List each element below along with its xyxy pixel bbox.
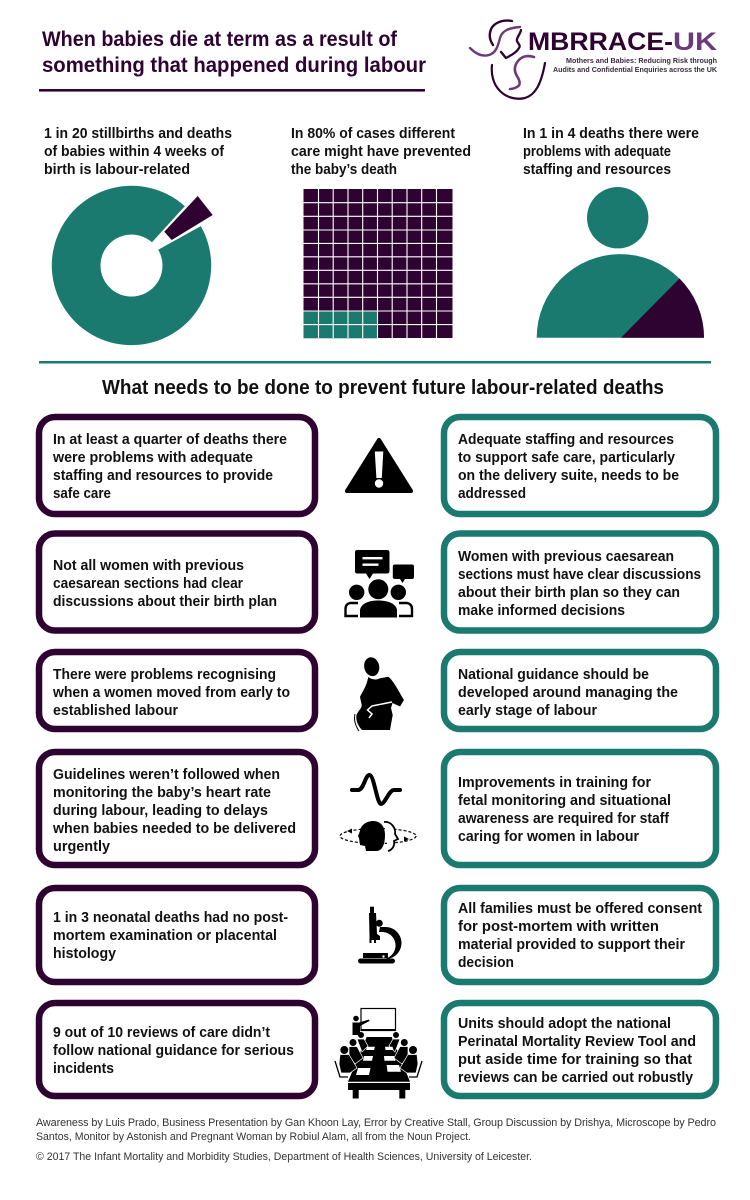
footer credits — [36, 1117, 716, 1163]
panel: caesarean problem — [39, 534, 315, 630]
person chart: 1 in 4 — [537, 187, 704, 338]
panel: post-mortem action: for post-mortem with written — [458, 918, 659, 935]
panel: early labour action: National guidance should be — [458, 666, 649, 683]
panel: post-mortem problem: 1 in 3 neonatal deaths had no post- — [53, 909, 288, 926]
donut chart: 1 in 20 — [52, 186, 213, 345]
panel: reviews action: reviews can be carried out robustly — [458, 1069, 694, 1086]
icon: group discussion — [346, 550, 414, 618]
panel: staffing problem: staffing and resources to provide — [53, 467, 273, 484]
panel: staffing action — [444, 417, 716, 514]
stat text: 80%: In 80% of cases different — [291, 125, 455, 142]
panel: caesarean action: Women with previous caesarean — [458, 548, 674, 565]
footer credits: Awareness by Luis Prado, Business Presentation by Gan Khoon Lay, Error by Creative Stall, Group Discussion by Drishya, Microscope by Pedro — [36, 1117, 716, 1129]
panel: caesarean problem: Not all women with previous — [53, 557, 244, 574]
stat text: 1 in 20 — [44, 125, 232, 178]
logo: MBRRACE-UK: Mothers and Babies: Reducing Risk through — [566, 56, 717, 65]
footer credits: Santos, Monitor by Astonish and Pregnant Woman by Robiul Alam, all from the Noun Project. — [36, 1131, 471, 1143]
heading: What needs to be done to prevent future labour-related deaths — [102, 377, 664, 399]
panel: staffing problem — [39, 417, 315, 514]
logo: MBRRACE-UK: Audits and Confidential Enquiries across the UK — [553, 65, 717, 74]
panel: caesarean action — [444, 534, 716, 630]
panel: early labour problem: There were problems recognising — [53, 666, 276, 683]
panel: early labour problem: when a women moved from early to — [52, 684, 290, 701]
title: When babies die at term as a result of — [42, 28, 398, 51]
logo: MBRRACE-UK: UK — [673, 28, 717, 56]
panel: early labour action — [444, 652, 716, 729]
panel: monitoring action — [444, 752, 716, 865]
panel: reviews problem: incidents — [53, 1060, 114, 1077]
stat text: 80%: care might have prevented — [291, 143, 471, 160]
panel: reviews problem — [39, 1003, 315, 1096]
panel: monitoring problem: monitoring the baby’s heart rate — [53, 784, 271, 801]
stat text: 80%: the baby’s death — [291, 161, 397, 178]
panel: post-mortem problem: mortem examination or placental — [53, 927, 277, 944]
panel: reviews action: Units should adopt the national — [458, 1015, 671, 1032]
panel: staffing problem: were problems with adequate — [52, 449, 253, 466]
panel: staffing action: Adequate staffing and resources — [458, 431, 674, 448]
panel: early labour problem — [39, 652, 315, 729]
panel: post-mortem problem — [39, 888, 315, 982]
panel: post-mortem action: material provided to support their — [458, 936, 685, 953]
panel: monitoring problem: during labour, leading to delays — [53, 802, 268, 819]
panel: post-mortem action — [444, 888, 716, 982]
panel: caesarean action: sections must have clear discussions — [458, 566, 701, 583]
panel: monitoring action: Improvements in training for — [458, 774, 651, 791]
panel: reviews problem: 9 out of 10 reviews of care didn’t — [53, 1024, 270, 1041]
panel: monitoring action: caring for women in labour — [458, 828, 639, 845]
logo: MBRRACE-UK: MBRRACE- — [528, 28, 673, 56]
panel: monitoring action: fetal monitoring and situational — [458, 792, 671, 809]
panel: staffing action: addressed — [458, 485, 526, 502]
stat text: 1 in 20: of babies within 4 weeks of — [44, 143, 225, 160]
stat text: 1 in 20: 1 in 20 stillbirths and deaths — [44, 125, 232, 142]
panel: caesarean action: about their birth plan so they can — [458, 584, 680, 601]
stat text: 1 in 4: problems with adequate — [523, 143, 671, 160]
panel: caesarean problem: caesarean sections had clear — [53, 575, 243, 592]
panel: monitoring problem — [39, 752, 315, 865]
panel: staffing action: on the delivery suite, needs to be — [458, 467, 679, 484]
panel: staffing action: to support safe care, particularly — [458, 449, 676, 466]
panel: post-mortem action: decision — [458, 954, 514, 971]
waffle chart: 80% — [304, 189, 452, 338]
icon: business presentation — [335, 1008, 422, 1098]
panel: monitoring problem: Guidelines weren’t followed when — [53, 766, 280, 783]
title — [42, 28, 426, 77]
icon: warning triangle — [347, 440, 411, 491]
stat text: 1 in 4 — [523, 125, 699, 178]
panel: staffing problem: safe care — [53, 485, 111, 502]
stat text: 1 in 4: staffing and resources — [523, 161, 671, 178]
panel: monitoring problem: when babies needed to be delivered — [52, 820, 296, 837]
icon: pregnant woman — [354, 656, 404, 731]
panel: post-mortem problem: histology — [53, 945, 117, 962]
icon: monitor wave and awareness — [340, 775, 416, 851]
panel: post-mortem action: All families must be offered consent — [458, 900, 702, 917]
panel: reviews problem: follow national guidance for serious — [53, 1042, 294, 1059]
panel: caesarean action: make informed decisions — [458, 602, 625, 619]
stat text: 80% — [291, 125, 471, 178]
logo: MBRRACE-UK — [470, 21, 717, 99]
panel: monitoring action: awareness are required for staff — [458, 810, 670, 827]
panel: reviews action — [444, 1003, 716, 1096]
panel: early labour action: developed around managing the — [458, 684, 678, 701]
panel: monitoring problem: urgently — [53, 838, 111, 855]
panel: early labour action: early stage of labour — [458, 702, 597, 719]
title: something that happened during labour — [42, 54, 426, 77]
panel: reviews action: Perinatal Mortality Review Tool and — [458, 1033, 696, 1050]
panel: reviews action: put aside time for training so that — [458, 1051, 692, 1068]
panel: early labour problem: established labour — [53, 702, 178, 719]
footer credits: © 2017 The Infant Mortality and Morbidity Studies, Department of Health Sciences, University of Leicester. — [36, 1151, 532, 1163]
panel: caesarean problem: discussions about their birth plan — [53, 593, 277, 610]
icon: microscope — [358, 907, 402, 964]
stat text: 1 in 4: In 1 in 4 deaths there were — [523, 125, 699, 142]
panel: staffing problem: In at least a quarter of deaths there — [53, 431, 287, 448]
stat text: 1 in 20: birth is labour-related — [44, 161, 190, 178]
